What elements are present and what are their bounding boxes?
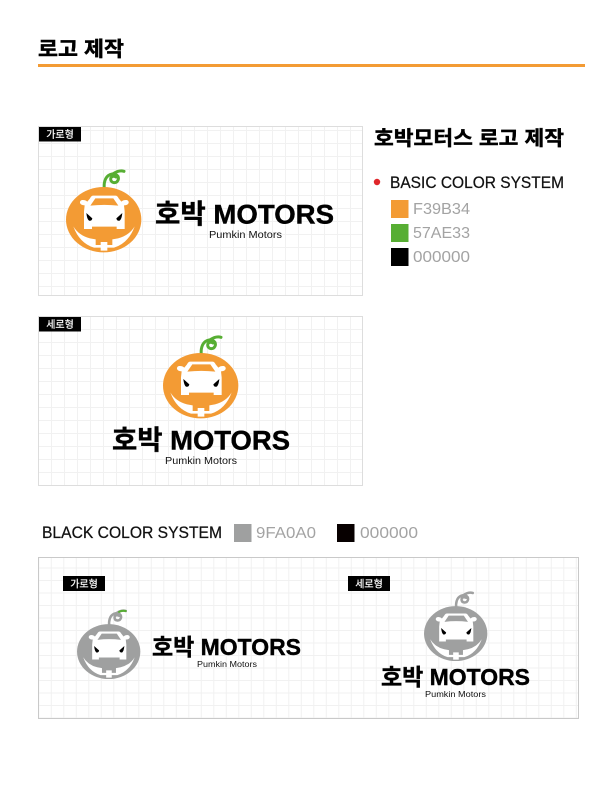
- label: horizontal tag: 가로형: [70, 576, 98, 590]
- legend: black color system: BLACK COLOR SYSTEM: [42, 523, 222, 542]
- logo wordmark: Pumkin Motors: [425, 689, 486, 699]
- legend: basic color system: [374, 173, 564, 266]
- heading: logo production: 호박모터스 로고 제작: [374, 122, 564, 151]
- icon: pumpkin car logo: [66, 171, 141, 252]
- label: horizontal tag: [63, 576, 105, 591]
- panel: horizontal logo: [38, 126, 362, 296]
- legend: black color system: 9FA0A0: [256, 525, 316, 542]
- legend: black color system: 000000: [360, 525, 418, 542]
- logo wordmark: 호박 MOTORS: [381, 664, 530, 690]
- logo wordmark: 호박 MOTORS: [155, 200, 334, 230]
- icon: grey pumpkin vertical: [424, 593, 487, 661]
- icon: grey pumpkin horizontal: [77, 611, 140, 679]
- label: vertical tag: [39, 316, 81, 332]
- legend: black color system: [42, 523, 418, 542]
- logo wordmark: Pumkin Motors: [165, 456, 237, 467]
- label: vertical tag: 세로형: [355, 576, 383, 590]
- legend: basic color system: F39B34: [413, 201, 470, 218]
- logo wordmark: 호박 MOTORS: [112, 426, 290, 456]
- panel: vertical logo: [38, 316, 362, 486]
- label: horizontal tag: 가로형: [46, 126, 74, 141]
- title: 로고 제작: [38, 32, 124, 62]
- panel: black version logos: [38, 558, 578, 718]
- legend: basic color system: 000000: [413, 249, 470, 266]
- icon: pumpkin car logo: [163, 337, 238, 418]
- logo wordmark: Pumkin Motors: [209, 230, 282, 241]
- logo wordmark: Pumkin Motors: [197, 659, 257, 669]
- title: [38, 32, 585, 67]
- legend: basic color system: 57AE33: [413, 225, 470, 242]
- label: vertical tag: 세로형: [46, 316, 74, 331]
- label: vertical tag: [348, 576, 390, 591]
- logo wordmark: 호박 MOTORS: [152, 634, 301, 660]
- label: horizontal tag: [39, 126, 81, 142]
- legend: basic color system: BASIC COLOR SYSTEM: [390, 173, 564, 192]
